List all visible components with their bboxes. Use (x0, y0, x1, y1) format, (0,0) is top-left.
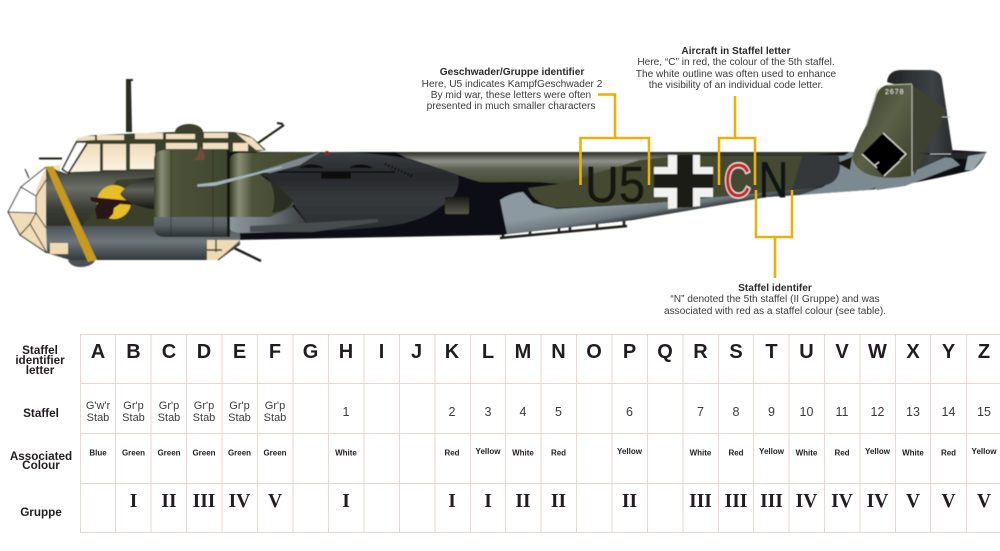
gold identification stripe (46, 166, 97, 262)
row: Staffel identifier letters: L (482, 341, 494, 363)
row: associated colour: Yellow (865, 447, 891, 456)
upper rear gun (258, 123, 284, 143)
row: Staffel numbers: 14 (942, 405, 955, 419)
row: Staffel identifier letters: F (269, 341, 281, 363)
row: Staffel numbers: 7 (697, 405, 704, 419)
row: Gruppe numerals: I (130, 491, 137, 512)
row: Staffel numbers: 4 (520, 405, 527, 419)
camouflage: green rear fuselage (528, 155, 803, 208)
row: Gruppe numerals: IV (867, 491, 888, 512)
row: Staffel identifier letters: K (445, 341, 460, 363)
row: associated colour: White (335, 448, 357, 458)
row: Staffel identifier letters: J (411, 341, 422, 363)
callout: Aircraft in Staffel letter (636, 46, 837, 91)
row: Staffel numbers: 2 (449, 405, 456, 419)
row: associated colour: Green (192, 448, 216, 458)
row: Staffel identifier letters: A (91, 341, 105, 363)
callout: Geschwader/Gruppe identifier (422, 67, 603, 112)
aircraft illustration (8, 70, 987, 267)
row: Gruppe numerals: IV (229, 491, 250, 512)
gondola (68, 260, 95, 267)
row: Staffel numbers: Gr'p (229, 400, 250, 412)
tail number: 2678 (885, 89, 905, 96)
row: Gruppe numerals: II (551, 491, 566, 512)
row: Staffel identifier letters: C (162, 341, 176, 363)
row: Staffel numbers: Stab (264, 412, 286, 424)
row: Staffel identifier letters: Q (657, 341, 673, 363)
balkenkreuz national marking (654, 155, 713, 209)
row labels: identifier (15, 354, 65, 367)
tail swastika blocked diamond (862, 89, 906, 176)
row: Staffel numbers: 5 (555, 405, 562, 419)
forward fuselage (46, 166, 156, 228)
row: Staffel numbers: Gr'p (194, 400, 214, 412)
tail fin (852, 84, 912, 178)
row: Staffel numbers (86, 400, 991, 424)
row: Staffel numbers: Gr'p (265, 400, 285, 412)
tail rudder (887, 70, 953, 172)
nacelle rear (230, 152, 320, 217)
row: Staffel numbers: 6 (626, 405, 633, 419)
row: Staffel numbers: 15 (977, 405, 991, 419)
cream panels (50, 240, 240, 260)
callout: Staffel identifer (664, 283, 886, 317)
row: Gruppe numerals: III (689, 491, 712, 512)
row: Staffel numbers: Gr'p (159, 400, 179, 412)
bomb rack rail (500, 219, 627, 238)
row: Gruppe numerals: III (760, 491, 783, 512)
row: associated colour: Yellow (617, 447, 643, 456)
row: associated colour: Yellow (759, 447, 785, 456)
row: associated colour: White (690, 448, 712, 458)
row labels: Colour (22, 459, 60, 472)
row: Gruppe numerals (130, 491, 991, 512)
row: Gruppe numerals: V (941, 491, 956, 512)
wing underside panel (250, 219, 378, 232)
row: associated colour: Red (444, 448, 460, 458)
row: Staffel numbers: Stab (122, 412, 145, 424)
engine nacelle front (154, 146, 229, 237)
canopy (62, 132, 266, 174)
row: Staffel numbers: 10 (800, 405, 813, 419)
row: Gruppe numerals: II (161, 491, 177, 512)
row: Staffel numbers: 12 (871, 405, 884, 419)
callout: Aircraft in Staffel letter: the visibility of an individual code letter. (649, 80, 823, 91)
row: Staffel identifier letters: S (729, 341, 743, 363)
row: Gruppe numerals: III (193, 491, 215, 512)
row: Staffel numbers: 9 (768, 405, 775, 419)
row: associated colour: White (796, 448, 818, 458)
row: associated colour: Green (157, 448, 181, 458)
row: Staffel numbers: 13 (906, 405, 920, 419)
row: Staffel identifier letters: V (835, 341, 849, 363)
row: associated colour: Red (834, 448, 850, 458)
row: Staffel identifier letters: E (233, 341, 246, 363)
callout: Geschwader/Gruppe identifier: Here, U5 indicates KampfGeschwader 2 (422, 79, 603, 90)
row: Gruppe numerals: V (977, 491, 991, 512)
callout: Staffel identifer: Staffel identifer (738, 283, 812, 294)
row: Gruppe numerals: II (622, 491, 637, 512)
row: Gruppe numerals: V (268, 491, 282, 512)
code letter C in red: C (724, 155, 751, 208)
row labels: Gruppe (20, 506, 62, 519)
row: Staffel numbers: Stab (228, 412, 251, 424)
row: associated colour: Red (728, 448, 744, 458)
leading edge pitot (198, 167, 282, 186)
row: Staffel identifier letters: O (586, 341, 602, 363)
callout: Aircraft in Staffel letter: Here, “C” in red, the colour of the 5th staffel. (637, 57, 835, 68)
row: Gruppe numerals: III (725, 491, 747, 512)
row: Staffel numbers: Stab (158, 412, 180, 424)
row: Gruppe numerals: II (515, 491, 531, 512)
wing (257, 151, 459, 231)
row: Staffel numbers: 11 (836, 405, 849, 419)
row labels: Associated (10, 450, 72, 463)
aircraft illustration: C (724, 155, 751, 208)
row: associated colour: Green (263, 448, 287, 458)
row: Staffel numbers: Stab (87, 412, 109, 424)
nose emblem (90, 185, 133, 219)
row: associated colour: Green (228, 448, 251, 458)
engine spinner (120, 177, 156, 209)
row: Staffel identifier letters: R (693, 341, 708, 363)
row: associated colour: Yellow (972, 447, 997, 456)
row: associated colour: Yellow (476, 447, 501, 456)
row: Staffel identifier letters: D (197, 341, 211, 363)
row: associated colour: Green (122, 448, 145, 458)
callout: Geschwader/Gruppe identifier: Geschwader/Gruppe identifier (440, 67, 584, 78)
row: Staffel identifier letters: H (339, 341, 353, 363)
row: Staffel numbers: 1 (343, 405, 350, 419)
row: Gruppe numerals: V (906, 491, 920, 512)
bracket: N (756, 190, 792, 278)
row: Staffel identifier letters: Z (978, 341, 990, 363)
code letter N: N (759, 152, 788, 208)
table grid (80, 334, 1000, 533)
row: Staffel identifier letters: W (868, 341, 887, 363)
row: Staffel identifier letters: X (906, 341, 920, 363)
row: associated colour: White (902, 448, 924, 458)
row labels: Staffel (22, 344, 58, 357)
row: Staffel identifier letters: N (551, 341, 566, 363)
row: associated colour: Blue (89, 448, 107, 458)
row: Staffel identifier letters: B (126, 341, 141, 363)
row: Gruppe numerals: I (342, 491, 350, 512)
row: Staffel identifier letters: Y (942, 341, 956, 363)
callout: Aircraft in Staffel letter: The white outline was often used to enhance (636, 69, 837, 80)
row labels: Staffel (23, 407, 59, 420)
upper fuselage highlight band (395, 152, 680, 184)
radio mast (126, 79, 133, 132)
row: Staffel identifier letters: P (623, 341, 636, 363)
gunner detail (193, 146, 205, 160)
code letters U5: U5 (585, 156, 645, 213)
row labels (10, 344, 72, 519)
row: Staffel numbers: Stab (193, 412, 215, 424)
dorsal dome (175, 124, 203, 140)
row: Staffel identifier letters (91, 341, 990, 363)
callout: Geschwader/Gruppe identifier: presented in much smaller characters (427, 101, 595, 112)
row: Staffel identifier letters: M (515, 341, 531, 363)
row: Staffel numbers: 8 (733, 405, 740, 419)
row: Gruppe numerals: I (484, 491, 492, 512)
rear fuselage (200, 150, 986, 240)
callout: Staffel identifer: “N” denoted the 5th staffel (II Gruppe) and was (670, 294, 880, 305)
row: Staffel numbers: G'w'r (86, 400, 111, 412)
callout: Geschwader/Gruppe identifier: By mid war, these letters were often (431, 90, 591, 101)
row labels: letter (26, 364, 55, 377)
bracket: U5 (580, 94, 649, 185)
row: Gruppe numerals: IV (796, 491, 817, 512)
row: associated colour (89, 447, 997, 458)
callout: Staffel identifer: associated with red as a staffel colour (see table). (664, 306, 886, 317)
nose glazing (8, 158, 62, 258)
row: associated colour: Red (551, 448, 566, 458)
row: Gruppe numerals: I (448, 491, 456, 512)
row: Staffel identifier letters: T (765, 341, 778, 363)
lower rear gun (232, 247, 261, 261)
callout: Aircraft in Staffel letter: Aircraft in Staffel letter (681, 46, 791, 57)
tailplane (918, 152, 987, 160)
row: Staffel identifier letters: G (303, 341, 318, 363)
camouflage: grey belly (500, 187, 823, 234)
row: Staffel numbers: 3 (485, 405, 492, 419)
row: associated colour: Red (941, 448, 956, 458)
row: Staffel identifier letters: I (379, 341, 384, 363)
row: Staffel identifier letters: U (799, 341, 814, 363)
bracket: C (719, 96, 755, 185)
row: Staffel numbers: Gr'p (123, 400, 144, 412)
fuselage hatch (445, 197, 469, 214)
row: Gruppe numerals: IV (831, 491, 853, 512)
row: associated colour: White (512, 448, 534, 458)
